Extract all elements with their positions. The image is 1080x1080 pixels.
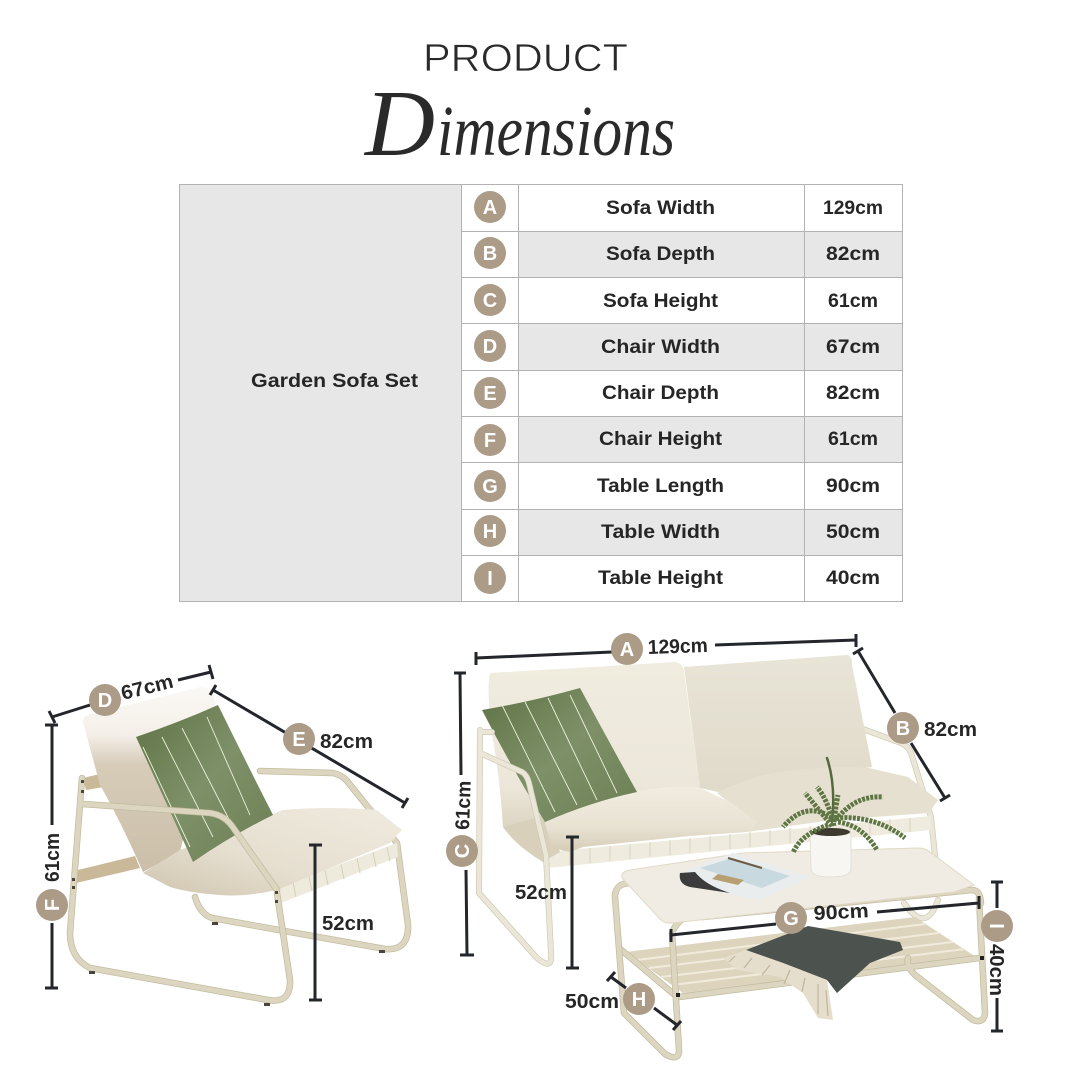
chair back cushion: [83, 687, 216, 872]
table dimension G: 90cm: 90cm: [813, 900, 869, 925]
chair dimension D: 67cm: D: [98, 690, 112, 712]
table dimension H: 50cm: 50cm: [565, 991, 619, 1013]
title: PRODUCT: PRODUCT: [423, 37, 628, 80]
table row H: 50cm: [826, 522, 880, 543]
sofa green pillow: [482, 688, 637, 822]
table row D: 67cm: [826, 337, 880, 358]
illustration: sofa: [479, 655, 938, 964]
title: Dimensions script: imensions: [437, 91, 675, 171]
table top: [622, 848, 974, 923]
sofa dimension B: 82cm: [853, 648, 977, 801]
table row A: A: [483, 197, 497, 219]
illustration: armchair: [70, 687, 408, 1006]
table row E: 82cm: [826, 383, 880, 404]
illustration: coffee table: [615, 758, 985, 1057]
table label cell: Garden Sofa Set: [180, 184, 462, 602]
table row I: 40cm: [826, 568, 880, 589]
table row I: I: [487, 568, 493, 590]
table row C: C: [483, 290, 497, 312]
table row G: G: [482, 476, 498, 498]
table row I: Table Height: [598, 568, 724, 589]
chair wooden crossbars: [76, 774, 140, 883]
sofa left seat cushion: [545, 787, 757, 852]
sofa dimension B: 82cm: B: [896, 718, 910, 740]
chair seat cushion: [143, 808, 402, 895]
table dimension H: 50cm: [565, 972, 681, 1030]
table row I: [462, 556, 902, 602]
table dimension I: 40cm: 40cm: [985, 944, 1007, 996]
table row H: H: [483, 521, 497, 543]
chair dimension D: 67cm: 67cm: [119, 671, 176, 705]
table shelf: [626, 917, 976, 993]
table dimension I: 40cm: [981, 882, 1013, 1031]
table dimension I: 40cm: I: [985, 923, 1007, 929]
table row E: Chair Depth: [602, 383, 719, 404]
bolts: [676, 956, 984, 997]
sofa dimension C: 61cm: C: [452, 844, 474, 858]
table row F: 61cm: [828, 429, 878, 450]
table row C: Sofa Height: [603, 291, 719, 312]
chair dimension E: 82cm: 82cm: [320, 731, 373, 753]
sofa webbing: [547, 816, 931, 868]
table dimension G: 90cm: [671, 896, 979, 942]
table row F: F: [484, 430, 496, 452]
table row D: D: [483, 336, 497, 358]
table row G: [462, 462, 902, 510]
table row E: E: [483, 383, 497, 405]
sofa left back cushion: [489, 662, 700, 827]
dimensions table: [180, 184, 902, 602]
table row E: [462, 370, 902, 416]
table row B: 82cm: [826, 244, 880, 265]
table row D: [462, 324, 902, 370]
chair dimension F: 61cm: [36, 725, 68, 988]
sofa seat height: 52cm: [515, 837, 579, 968]
chair dimension E: 82cm: [210, 685, 408, 808]
table dimension H: 50cm: H: [632, 989, 646, 1011]
sofa dimension A: 129cm: 129cm: [647, 635, 708, 659]
table row H: [462, 510, 902, 556]
title: Dimensions script: D: [363, 72, 435, 176]
table row F: Chair Height: [599, 429, 723, 450]
table row G: 90cm: [826, 476, 880, 497]
table row B: [462, 232, 902, 278]
sofa dimension C: 61cm: 61cm: [452, 780, 476, 830]
chair feet and bolts: [72, 780, 385, 1006]
magazine: [680, 853, 810, 900]
table row F: [462, 416, 902, 462]
chair green pillow: [136, 705, 273, 862]
chair dimension F: 61cm: F: [42, 899, 64, 911]
chair webbing: [277, 843, 398, 903]
sofa dimension B: 82cm: 82cm: [924, 719, 977, 741]
table row B: Sofa Depth: [606, 244, 715, 265]
table row A: 129cm: [823, 198, 883, 219]
chair dimension F: 61cm: 61cm: [42, 833, 64, 882]
table dimension G: 90cm: G: [783, 908, 799, 930]
sofa dimension A: 129cm: A: [620, 639, 634, 661]
sofa right seat cushion: [717, 767, 938, 832]
table row C: [462, 278, 902, 324]
chair dimension D: 67cm: [49, 665, 213, 723]
sofa seat height: 52cm: 52cm: [515, 882, 567, 904]
table label cell: Garden Sofa Set: Garden Sofa Set: [251, 371, 419, 392]
sofa right back cushion: [684, 655, 872, 792]
sofa dimension C: 61cm: [446, 673, 478, 955]
chair seat height: 52cm: [309, 845, 374, 1000]
table row A: Sofa Width: [606, 198, 715, 219]
sofa left lower back flap: [503, 815, 560, 862]
potted plant: [783, 758, 905, 877]
chair dimension E: 82cm: E: [292, 729, 306, 751]
folded blanket: [723, 926, 903, 1020]
sofa dimension A: 129cm: [476, 633, 856, 665]
table row D: Chair Width: [601, 337, 720, 358]
table row H: Table Width: [601, 522, 720, 543]
table row B: B: [483, 243, 497, 265]
table row A: [462, 184, 902, 232]
table row G: Table Length: [597, 476, 724, 497]
chair seat height: 52cm: 52cm: [322, 913, 374, 935]
table row C: 61cm: [828, 291, 878, 312]
